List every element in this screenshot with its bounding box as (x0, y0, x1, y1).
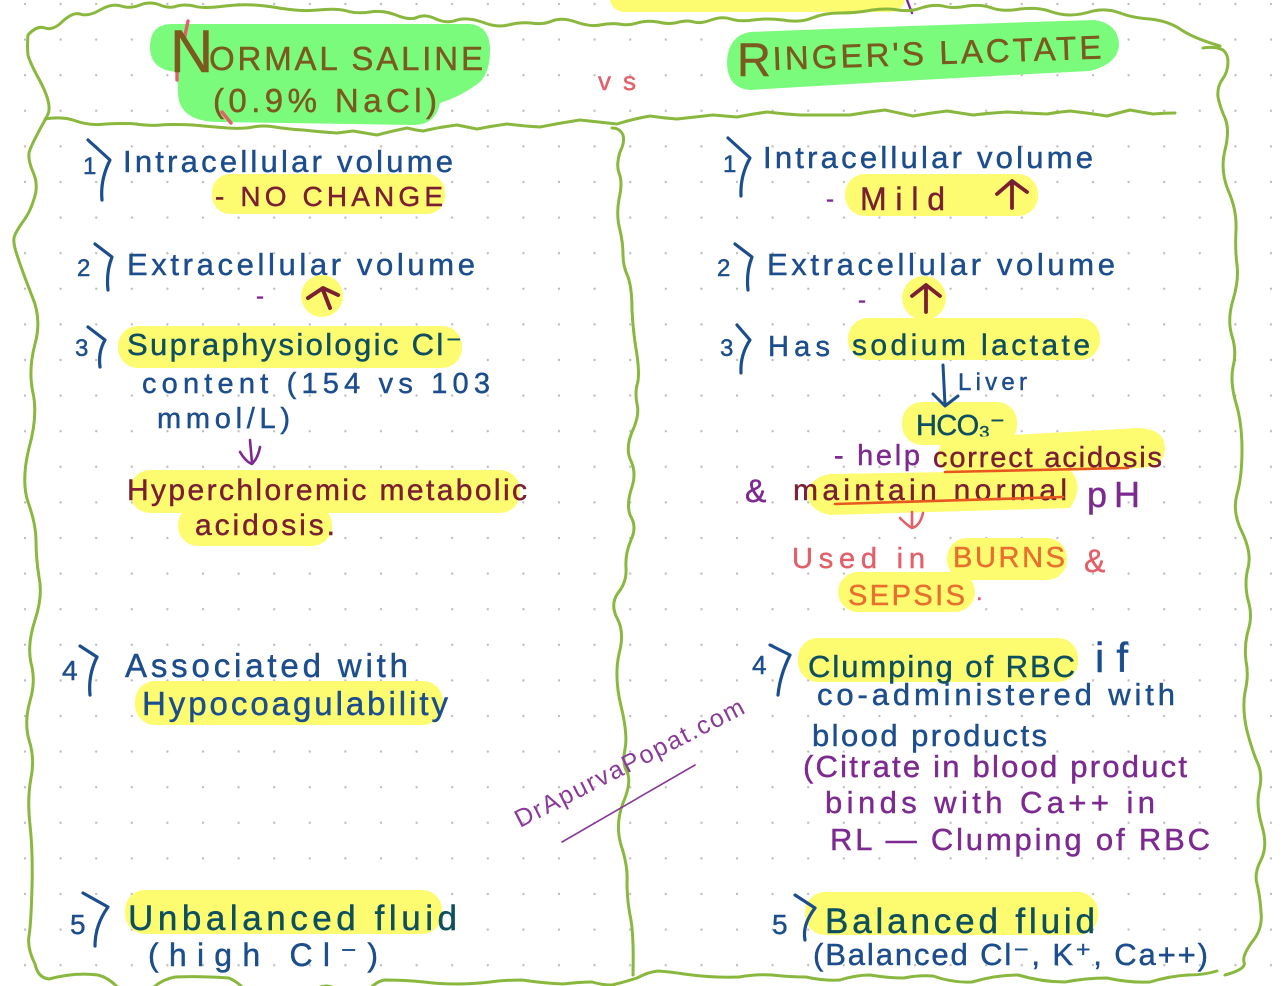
point 4: hypocoagulability: Associated with (125, 647, 408, 684)
point 2: extracellular volume: 2 (77, 255, 90, 282)
point 3: sodium lactate: Liver (958, 369, 1027, 396)
point 2: extracellular volume (717, 244, 1115, 320)
point 1: intracellular volume: 1 (723, 151, 736, 178)
panel: normal saline (62, 140, 527, 973)
point 3: chloride content: content (154 vs 103 (142, 368, 490, 400)
point 3: sodium lactate: . (976, 579, 983, 606)
point 4: hypocoagulability (62, 646, 448, 725)
point 3: chloride content: mmol/L) (157, 403, 290, 435)
point 4: clumping of RBC: Clumping of RBC (808, 649, 1075, 684)
point 3: sodium lactate: SEPSIS (848, 580, 965, 612)
point 4: hypocoagulability: Hypocoagulability (142, 685, 448, 722)
point 3: sodium lactate: pH (1087, 474, 1140, 515)
point 3: sodium lactate: maintain normal (793, 474, 1067, 507)
heading: ringer's lactate (727, 20, 1119, 90)
point 3: sodium lactate: correct acidosis (933, 442, 1162, 474)
point 5: unbalanced fluid: (high Cl⁻) (148, 937, 378, 973)
heading: ringer's lactate: INGER'S LACTATE (772, 29, 1102, 77)
point 3: chloride content (75, 326, 527, 546)
vs label: vs (598, 66, 636, 96)
heading: ringer's lactate: R (737, 33, 771, 86)
heading: normal saline (150, 18, 490, 125)
heading: normal saline: (0.9% NaCl) (213, 82, 437, 119)
point 3: sodium lactate: & (1084, 543, 1105, 579)
point 1: intracellular volume: - NO CHANGE (215, 181, 443, 212)
point 1: intracellular volume: Intracellular volume (123, 144, 453, 179)
point 4: clumping of RBC: co-administered with (817, 677, 1175, 712)
point 4: clumping of RBC: binds with Ca++ in (825, 785, 1155, 820)
point 4: clumping of RBC: RL — Clumping of RBC (830, 822, 1210, 857)
point 2: extracellular volume: - (256, 283, 264, 310)
point 2: extracellular volume: - (858, 287, 866, 314)
point 1: intracellular volume (83, 140, 453, 214)
point 4: clumping of RBC: 4 (752, 650, 766, 680)
top cut-off highlight (610, 0, 912, 13)
point 1: intracellular volume: - (826, 186, 834, 213)
point 3: sodium lactate: BURNS (953, 542, 1065, 574)
point 5: unbalanced fluid: Unbalanced fluid (128, 899, 457, 938)
point 5: unbalanced fluid: 5 (70, 909, 86, 940)
point 4: clumping of RBC: blood products (812, 718, 1047, 753)
point 5: balanced fluid (772, 892, 1208, 972)
point 3: chloride content: acidosis. (195, 509, 335, 542)
point 3: sodium lactate: HCO₃⁻ (916, 410, 1005, 442)
point 1: intracellular volume: 1 (83, 153, 96, 180)
point 5: balanced fluid: (Balanced Cl⁻, K⁺, Ca++) (813, 937, 1208, 972)
heading: normal saline: ORMAL SALINE (209, 40, 483, 77)
point 3: sodium lactate: 3 (720, 335, 733, 362)
point 2: extracellular volume: 2 (717, 255, 730, 282)
point 5: unbalanced fluid (70, 890, 457, 973)
point 3: sodium lactate: - help (834, 440, 920, 472)
point 1: intracellular volume: Intracellular volume (763, 140, 1093, 175)
watermark: DrApurvaPopat.com (510, 693, 749, 833)
point 3: chloride content: 3 (75, 335, 88, 362)
point 2: extracellular volume: Extracellular volume (767, 247, 1115, 282)
point 3: sodium lactate: Used in (792, 543, 925, 575)
heading: normal saline: N (170, 18, 213, 85)
point 3: chloride content: Hyperchloremic metabolic (127, 474, 527, 507)
point 1: intracellular volume: Mild (860, 181, 945, 217)
point 5: balanced fluid: 5 (772, 909, 788, 940)
point 3: sodium lactate: sodium lactate (852, 329, 1090, 362)
point 3: sodium lactate: Has (768, 331, 830, 363)
point 3: sodium lactate: & (745, 473, 766, 509)
point 4: clumping of RBC: (Citrate in blood product (803, 749, 1187, 784)
point 3: chloride content: Supraphysiologic Cl⁻ (127, 327, 462, 362)
point 4: clumping of RBC: if (1095, 634, 1128, 681)
point 4: clumping of RBC (752, 634, 1210, 857)
point 2: extracellular volume: Extracellular volume (127, 247, 475, 282)
panel: ringer's lactate (717, 138, 1210, 972)
point 1: intracellular volume (723, 138, 1093, 217)
point 5: balanced fluid: Balanced fluid (825, 902, 1095, 941)
point 3: sodium lactate (720, 318, 1165, 612)
point 4: hypocoagulability: 4 (62, 655, 78, 686)
point 2: extracellular volume (77, 244, 475, 317)
